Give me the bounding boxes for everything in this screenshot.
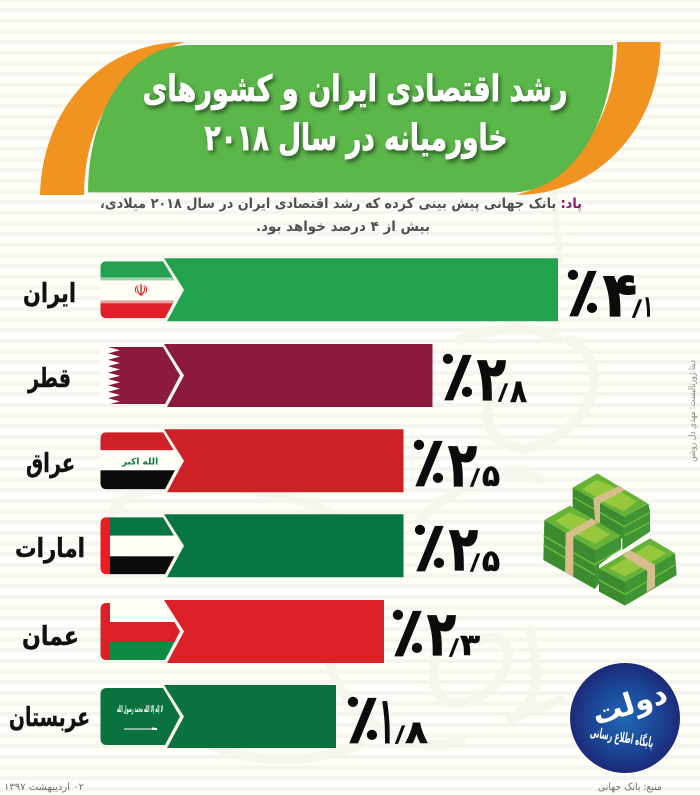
flag: UAE: [100, 517, 180, 574]
row: UAE: [16, 514, 500, 578]
value: 2.5: ۵: [482, 544, 500, 579]
value: 2.3: •: [408, 632, 426, 665]
label: Saudi: عربستان: [9, 703, 90, 733]
flag: Iraq: [100, 432, 179, 490]
label: Qatar: قطر: [27, 364, 71, 394]
bar: Iraq 2.5: [164, 429, 404, 492]
value: 2.5: /: [417, 516, 443, 579]
row: Qatar: [27, 344, 527, 407]
value: 4.1: [564, 258, 652, 331]
left orange leaf: [40, 42, 185, 195]
value: 2.3: /: [395, 601, 421, 664]
logo: government portal: دولت: [588, 676, 672, 733]
bar: Iran 4.1: [164, 258, 558, 321]
value: 2.3: /: [449, 636, 460, 661]
label: Iraq: عراق: [26, 449, 75, 479]
bar: Oman 2.3: [164, 600, 384, 663]
left stack: [543, 520, 595, 589]
value: 2.5: /: [470, 551, 481, 576]
value: 2.5: •: [430, 547, 448, 580]
value: 2.5: ۵: [482, 459, 500, 494]
row: Oman: [23, 600, 480, 663]
value: 1.8: /: [350, 688, 376, 751]
bar: Qatar 2.8: [164, 344, 432, 407]
value: 2.8: ۲: [477, 342, 506, 415]
value: 4.1: /: [570, 261, 596, 324]
value: 2.8: /: [445, 345, 471, 408]
value: 1.8: /: [395, 723, 406, 748]
label: Iran: ایران: [23, 279, 76, 309]
value: 2.5: /: [470, 466, 481, 491]
value: 2.5: /: [416, 431, 442, 494]
value: 4.1: ۴: [603, 258, 637, 331]
subtitle text block: بیش از ۴ درصد خواهد بود.: [256, 219, 430, 235]
value: 2.5: •: [410, 429, 428, 462]
value: 2.5: ۲: [449, 512, 478, 585]
row: Iran: [24, 258, 650, 322]
flag: Qatar: [100, 347, 180, 404]
value: 2.8: /: [498, 381, 509, 406]
background calligraphy watermark: [110, 190, 594, 759]
value: 2.8: ۸: [510, 372, 527, 410]
top stack: [573, 488, 624, 540]
footer: date: ۰۲ اردیبهشت ۱۳۹۷: [4, 782, 84, 793]
value: 4.1: •: [564, 259, 582, 292]
value: 2.3: [389, 597, 480, 670]
value: 2.3: ۳: [460, 628, 480, 663]
flag: Iran: ☫: [133, 281, 149, 301]
value: 2.8: •: [458, 376, 476, 409]
value: 1.8: ۱: [380, 684, 393, 757]
title text: خاورمیانه در سال ۲۰۱۸: [204, 118, 508, 159]
right stack: [599, 568, 625, 606]
text: ۱: [644, 290, 652, 323]
value: 2.5: [410, 428, 500, 501]
subtitle text block: پاد: بانک جهانی پیش بینی کرده که رشد اقتصادی ایران در سال ۲۰۱۸ میلادی،: [100, 196, 582, 212]
title text: رشد اقتصادی ایران و کشورهای: [142, 69, 568, 110]
right orange leaf: [516, 42, 661, 195]
value: 1.8: ۸: [405, 713, 429, 751]
value: 2.5: [411, 512, 500, 585]
credit: data journalist: دیتا ژورنالیست: مهدی دل روشن: [688, 360, 698, 462]
subtitle text block: [100, 196, 582, 235]
label: Oman: عمان: [22, 622, 79, 652]
value: 2.8: [439, 342, 527, 415]
title text: [142, 69, 568, 159]
flag: Saudi: لا إله إلا الله محمد رسول الله: [117, 704, 163, 715]
icon: stacks of money: [543, 473, 677, 606]
value: 2.3: •: [389, 599, 407, 632]
value: 2.3: ۲: [427, 597, 456, 670]
value: 4.1: •: [583, 292, 601, 325]
label: UAE: امارات: [15, 534, 85, 564]
value: 2.5: •: [429, 462, 447, 495]
footer: source: منبع: بانک جهانی: [598, 782, 662, 793]
value: 4.1: /: [632, 297, 643, 322]
value: 2.8: •: [439, 343, 457, 376]
value: 2.5: •: [411, 514, 429, 547]
value: 1.8: •: [363, 719, 381, 752]
logo: government portal: [570, 663, 680, 773]
bar: UAE 2.5: [164, 514, 404, 577]
row: Saudi Arabia: [10, 685, 428, 748]
bar: Saudi 1.8: [164, 685, 336, 748]
title banner: [40, 42, 661, 195]
green banner: [88, 45, 613, 192]
value: 1.8: •: [344, 686, 362, 719]
value: 2.5: ۲: [448, 428, 477, 501]
flag: Oman: [100, 603, 180, 660]
value: 1.8: [344, 684, 429, 757]
flag: Saudi: [100, 688, 180, 745]
row: Iraq: [26, 429, 500, 492]
flag: Iran: [100, 261, 180, 318]
flag: Iraq: الله اكبر: [121, 457, 158, 467]
